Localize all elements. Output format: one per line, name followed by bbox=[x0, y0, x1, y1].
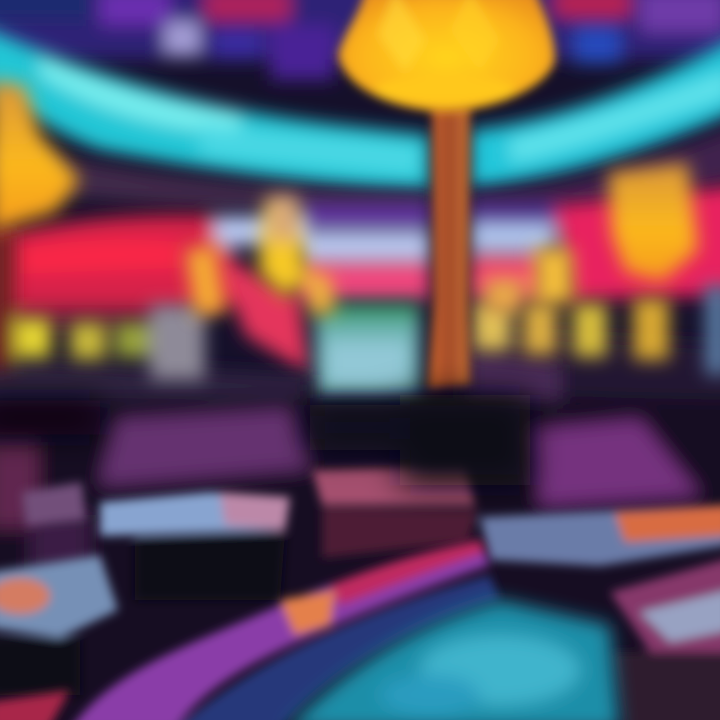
right lamp row bbox=[473, 285, 720, 375]
left chandelier bbox=[0, 80, 80, 232]
dark shadow masses bbox=[0, 395, 530, 485]
column bbox=[428, 105, 470, 390]
left lamp row bbox=[0, 230, 205, 380]
ceiling mosaic bbox=[0, 0, 720, 80]
central chandelier bbox=[338, 0, 555, 112]
cyan light band bbox=[0, 25, 720, 190]
lower hall bbox=[0, 330, 720, 720]
curved purple rail bbox=[0, 540, 500, 720]
right chandelier bbox=[608, 162, 698, 282]
small lamps bbox=[185, 195, 574, 316]
gaming tables bbox=[0, 465, 720, 720]
red and striped walls bbox=[0, 185, 720, 375]
teal pool floor bbox=[285, 600, 620, 720]
central screen bbox=[315, 303, 420, 404]
upper wall dark band bbox=[0, 125, 720, 212]
